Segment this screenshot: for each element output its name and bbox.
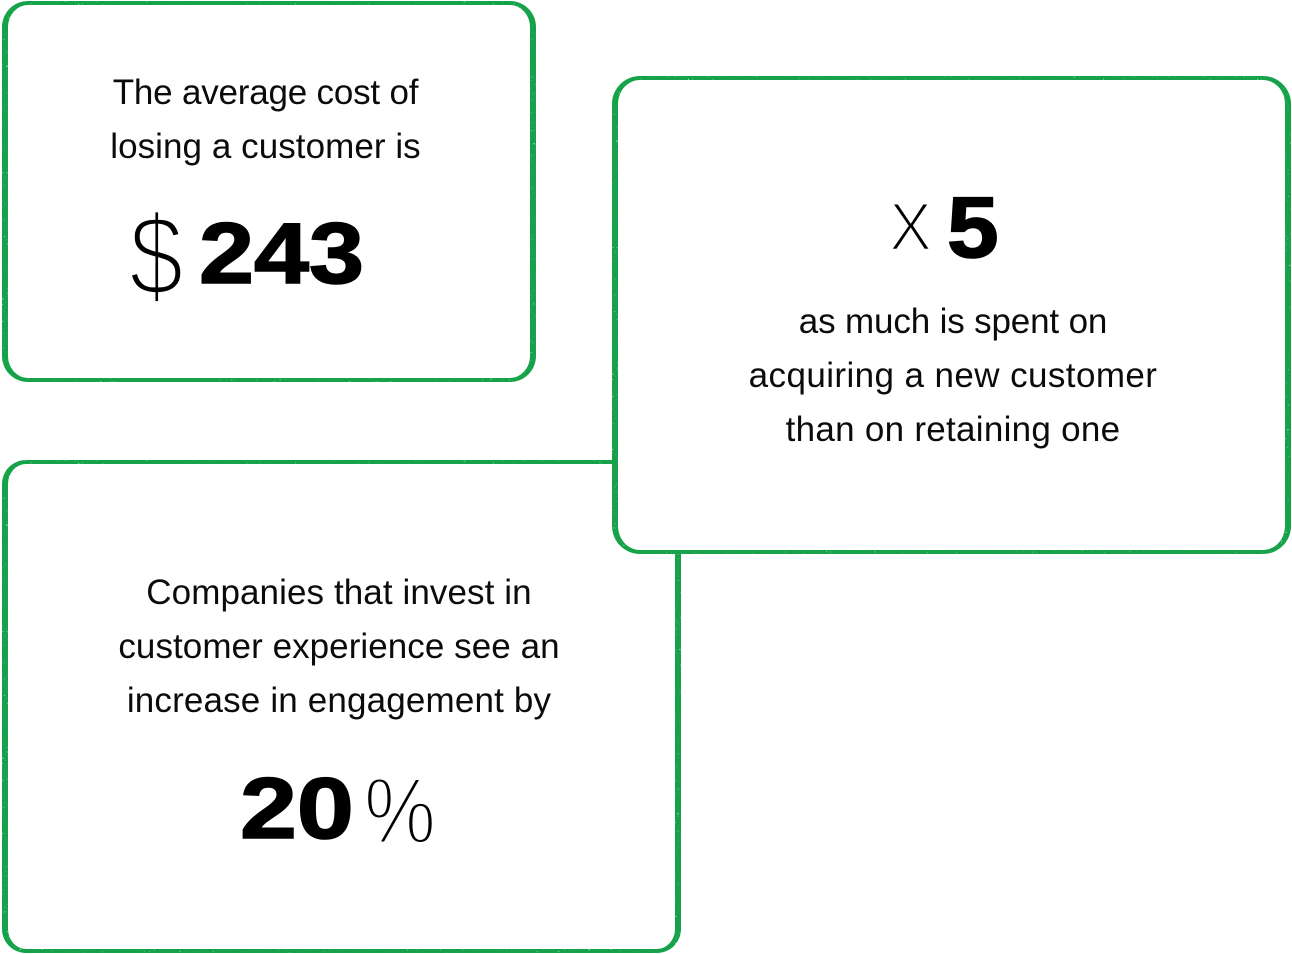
text: cost intro: The average cost of xyxy=(113,73,418,112)
text: engagement intro: increase in engagement by xyxy=(127,681,551,720)
number: 20: 20 xyxy=(240,761,354,857)
text: cost intro xyxy=(110,73,421,166)
text: acquisition comparison: than on retaining one xyxy=(786,410,1120,449)
text: acquisition comparison: acquiring a new customer xyxy=(749,356,1157,395)
symbol: times: X xyxy=(889,189,932,265)
stat: $243 xyxy=(129,193,364,320)
panel: companies investing in customer experience xyxy=(2,460,681,953)
panel: average cost of losing a customer xyxy=(2,1,536,382)
stat: 20% xyxy=(240,758,436,863)
text: engagement intro: customer experience see an xyxy=(118,627,560,666)
text: engagement intro xyxy=(118,573,560,720)
text: acquisition comparison xyxy=(749,302,1157,449)
stat: x5 xyxy=(889,180,999,276)
text: acquisition comparison: as much is spent on xyxy=(799,302,1107,341)
panel: acquiring versus retaining xyxy=(612,76,1291,554)
text: engagement intro: Companies that invest in xyxy=(146,573,532,612)
number: 5: 5 xyxy=(947,180,999,276)
backing: keeps the overlapping panel opaque xyxy=(618,82,1286,548)
text: cost intro: losing a customer is xyxy=(110,127,421,166)
symbol: dollar: $ xyxy=(129,193,184,320)
symbol: percent: % xyxy=(364,758,436,863)
number: 243: 243 xyxy=(199,206,364,302)
